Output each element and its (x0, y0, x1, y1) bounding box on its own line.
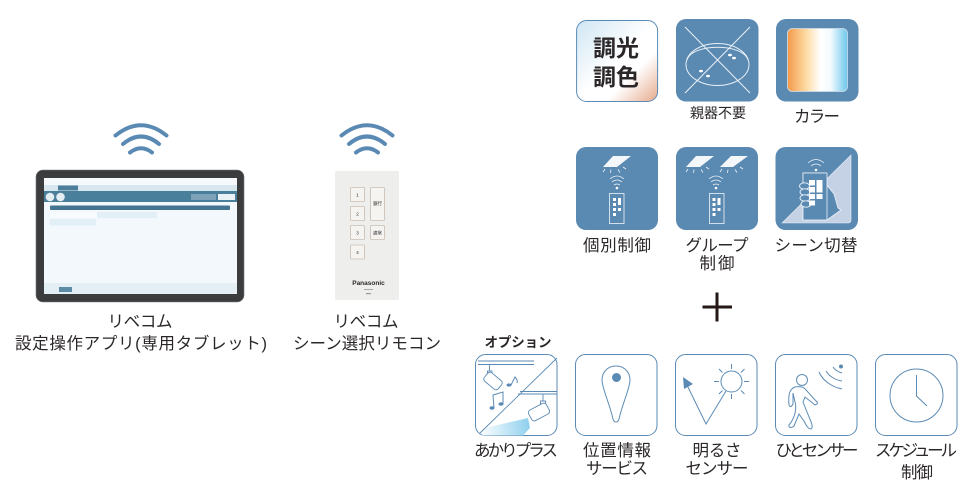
label: color: カラー (794, 108, 840, 126)
scene selection remote: 1 (356, 192, 359, 198)
icon: tablet wireless signal (116, 125, 166, 152)
label: location info: サービス (586, 459, 648, 478)
label: location info: 位置情報 (583, 441, 652, 460)
icon: human sensor (776, 354, 857, 436)
label: group control (686, 236, 749, 273)
label: schedule (875, 442, 957, 480)
label: human sensor: ひとセンサー (776, 442, 858, 460)
label: group control: 制御 (700, 254, 734, 273)
scene selection remote (335, 171, 399, 300)
scene selection remote: 適常 (373, 230, 382, 236)
label: brightness sensor: センサー (686, 460, 748, 478)
label: light plus: あかりプラス (474, 441, 558, 460)
icon: group control (676, 147, 758, 230)
icon: location info (576, 354, 657, 436)
label: scene switching: シーン切替 (774, 236, 858, 255)
icon: individual control (576, 147, 658, 230)
icon: brightness sensor (676, 354, 757, 436)
scene selection remote: 4 (356, 250, 359, 255)
tablet label: リベコム (108, 313, 172, 331)
label: brightness sensor: 明るさ (692, 441, 742, 460)
icon: remote wireless signal (342, 125, 392, 152)
plus sign (702, 292, 732, 322)
label: individual control: 個別制御 (583, 236, 651, 255)
scene selection remote: 2 (356, 212, 359, 216)
option heading: オプション (484, 335, 552, 350)
remote label: リベコム (334, 313, 398, 331)
label: schedule: スケジュール (875, 442, 957, 460)
label: location info (583, 441, 652, 478)
remote label (293, 313, 441, 353)
label: group control: グループ (686, 236, 749, 255)
scene selection remote: Panasonic (352, 280, 385, 287)
tablet label (15, 313, 267, 353)
scene selection remote: 銀行 (373, 200, 382, 207)
scene selection remote: 3 (356, 230, 359, 236)
icon: no parent fixture (676, 19, 758, 102)
icon: schedule (876, 354, 957, 436)
remote label: シーン選択リモコン (293, 334, 441, 353)
icon: dimming and toning: 調色 (593, 64, 639, 90)
tablet device (36, 170, 244, 302)
icon: color (776, 19, 858, 102)
icon: scene switching (776, 147, 858, 230)
label: no parent fixture: 親器不要 (690, 105, 746, 121)
icon: dimming and toning (577, 20, 658, 102)
tablet label: 設定操作アプリ(専用タブレット) (15, 333, 267, 353)
icon: light plus (476, 354, 557, 436)
label: brightness sensor (686, 441, 748, 478)
icon: dimming and toning: 調光 (593, 35, 639, 61)
